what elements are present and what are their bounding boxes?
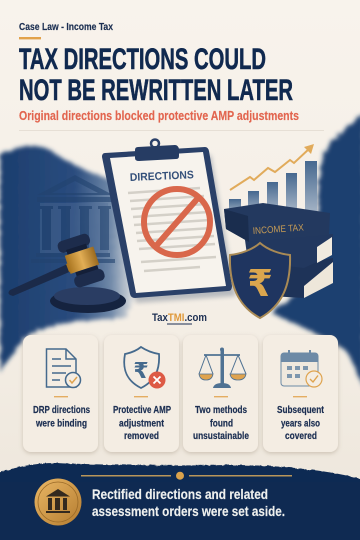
icon: document with check	[46, 349, 80, 388]
gavel head	[56, 232, 106, 290]
card label	[277, 405, 325, 442]
bottom book	[270, 258, 333, 298]
card label: years also	[281, 418, 320, 430]
card label	[33, 405, 90, 430]
icon: balance scales	[199, 348, 246, 388]
icon: calendar with check	[281, 350, 322, 387]
book title: INCOME TAX	[252, 222, 305, 237]
left blue brush wash	[0, 146, 135, 372]
card: subsequent years	[263, 335, 338, 452]
card label: Two methods	[195, 405, 247, 416]
card label: were binding	[35, 418, 87, 430]
footer text	[92, 487, 285, 519]
card: DRP directions	[23, 335, 98, 452]
card label	[193, 405, 249, 442]
title	[19, 43, 293, 107]
card label: found	[210, 418, 233, 430]
card label: Subsequent	[277, 405, 325, 416]
card label: Protective AMP	[113, 405, 171, 416]
middle book	[245, 234, 333, 268]
card: two methods	[183, 335, 258, 452]
illustration: courthouse	[31, 175, 115, 263]
card label: unsustainable	[193, 431, 249, 442]
icon: gold courthouse medal	[34, 478, 82, 526]
illustration: bar chart	[229, 161, 317, 213]
kicker label	[19, 22, 113, 39]
footer divider	[81, 472, 292, 480]
clipboard heading: DIRECTIONS	[130, 169, 194, 184]
footer banner	[0, 463, 360, 540]
icon: shield with rupee and cross: ₹	[133, 359, 149, 384]
card label: adjustment	[119, 418, 165, 430]
kicker label: Case Law - Income Tax	[19, 22, 113, 33]
footer text: assessment orders were set aside.	[92, 504, 285, 519]
prohibition sign	[144, 189, 210, 255]
clipboard clip	[135, 140, 179, 161]
card label: DRP directions	[33, 405, 90, 416]
illustration: stacked books	[224, 203, 333, 298]
card label	[113, 405, 171, 442]
brand logo: TaxTMI.com	[152, 312, 207, 324]
illustration: gavel	[8, 232, 126, 313]
subtitle: Original directions blocked protective AMP adjustments	[19, 109, 299, 123]
top book	[224, 203, 330, 242]
card label: removed	[124, 431, 159, 442]
footer text: Rectified directions and related	[92, 487, 268, 502]
card: protective AMP	[104, 335, 179, 452]
illustration: rising arrow	[230, 144, 314, 190]
card label: covered	[285, 431, 317, 442]
illustration: rupee shield	[230, 243, 290, 318]
illustration: clipboard	[102, 140, 236, 303]
gavel base	[50, 289, 126, 313]
document lines	[128, 188, 216, 271]
illustration: rupee shield: ₹	[247, 262, 273, 305]
right blue brush wash	[270, 114, 360, 388]
